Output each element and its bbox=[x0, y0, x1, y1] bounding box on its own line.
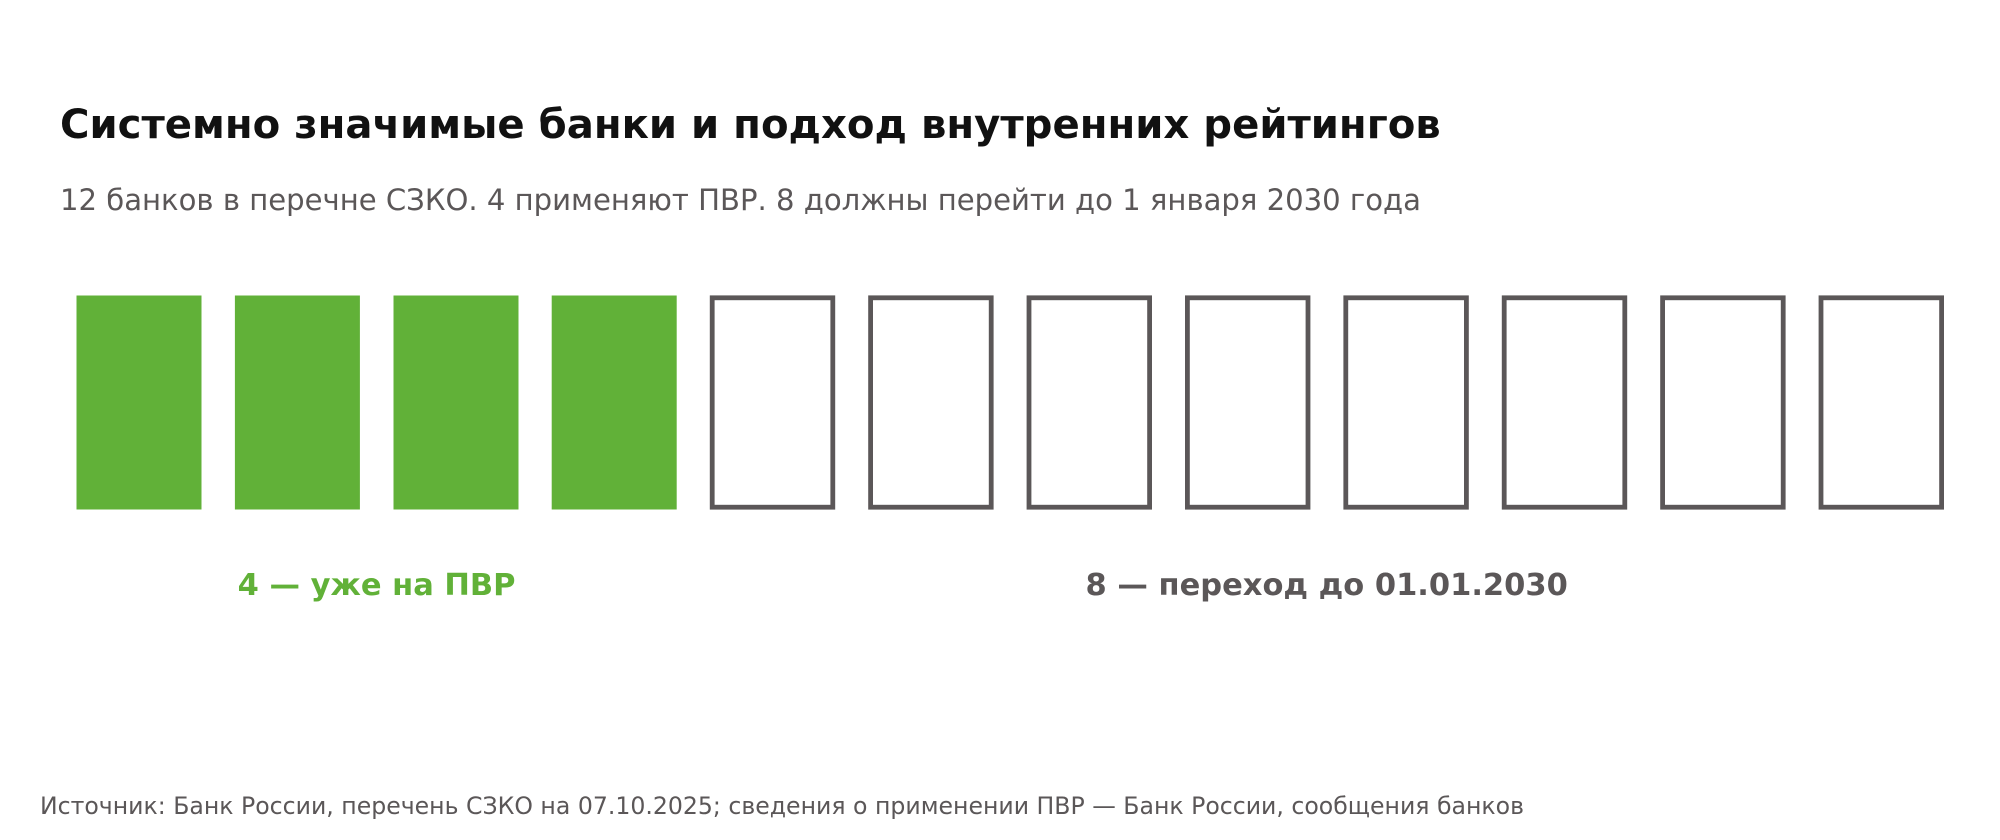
source note: Источник: Банк России, перечень СЗКО на 07.10.2025; сведения о применении ПВР — Банк России, сообщения банков bbox=[40, 792, 1524, 820]
subtitle: 12 банков в перечне СЗКО. 4 применяют ПВР. 8 должны перейти до 1 января 2030 года bbox=[60, 183, 1421, 217]
bank row: 4 banks already on IRB bbox=[76, 296, 677, 510]
bank row: 8 banks in transition bbox=[712, 298, 1942, 507]
label: transition by 01.01.2030: 8 — переход до 01.01.2030 bbox=[1086, 568, 1568, 603]
label: already on IRB: 4 — уже на ПВР bbox=[238, 568, 516, 603]
title: Системно значимые банки и подход внутренних рейтингов bbox=[60, 102, 1441, 148]
